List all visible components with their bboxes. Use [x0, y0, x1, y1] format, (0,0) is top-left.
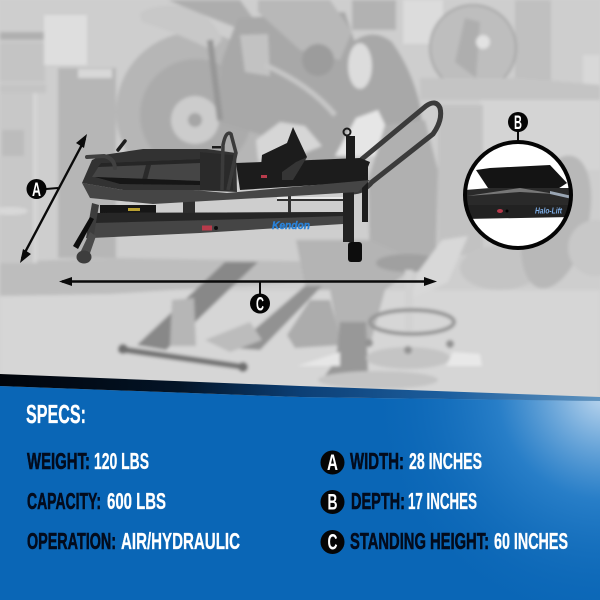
floor dark band: [0, 258, 330, 296]
compressor and big tyre: [462, 248, 528, 288]
spec: width: WIDTH:: [350, 448, 404, 474]
spec: depth: DEPTH:: [351, 488, 405, 514]
engine: [222, 11, 365, 160]
lower beam: [92, 212, 343, 238]
woman shoulder: [335, 110, 390, 156]
rear support posts: [343, 163, 368, 262]
dimension C arrow: [59, 277, 437, 316]
floor shadow: [318, 371, 438, 389]
inset circle: Halo-Lift: [535, 206, 562, 216]
dark curtain stripe: [515, 0, 550, 80]
side plate rail: [82, 180, 370, 204]
spec: depth: 17 INCHES: [408, 488, 477, 514]
tool chest: [58, 68, 116, 258]
spec: standing height: STANDING HEIGHT:: [350, 528, 489, 554]
badge C: C: [256, 294, 264, 316]
left bench: [0, 31, 44, 41]
heading: specs: SPECS:: [26, 399, 86, 429]
spec: depth: [320, 488, 477, 514]
dimension A arrow: [20, 134, 87, 263]
background: greyscale workshop photo: [0, 0, 600, 400]
spec: depth: B: [328, 490, 338, 514]
spec: weight: WEIGHT:: [27, 448, 90, 474]
badge B: B: [514, 113, 522, 134]
tray tie-down: [118, 141, 125, 150]
woman legs: [296, 240, 405, 340]
tire: [116, 34, 261, 192]
stool: [376, 254, 428, 273]
upper right post: [344, 128, 355, 160]
spec: width: A: [327, 450, 338, 475]
connecting rails: [100, 196, 343, 214]
blue specs panel: [0, 374, 600, 600]
spec: width: 28 INCHES: [409, 448, 482, 474]
clipboard: [44, 15, 87, 65]
spec: capacity: 600 LBS: [107, 488, 166, 514]
logo: Kendon: [272, 220, 310, 232]
dimension B inset: [465, 112, 572, 248]
lift scissor base: [137, 262, 258, 350]
wheel hoop: [222, 133, 236, 190]
product: motorcycle lift: [73, 103, 441, 264]
wall poster: [352, 0, 396, 30]
front tray rail: [87, 156, 115, 168]
main tray: [82, 149, 237, 192]
fan: [430, 5, 516, 91]
badge A: A: [32, 180, 41, 201]
lift handle: [352, 103, 441, 192]
woman hair and face: [354, 34, 422, 126]
fender and seat: [181, 32, 222, 47]
red tag: [202, 226, 212, 230]
spec: capacity: CAPACITY:: [27, 488, 101, 514]
woman torso: [368, 120, 438, 262]
spec: operation: AIR/HYDRAULIC: [121, 528, 240, 554]
right shelving: [420, 78, 600, 100]
spec: operation: OPERATION:: [27, 528, 116, 554]
panel top band: [0, 374, 600, 401]
spec: standing height: C: [328, 530, 338, 554]
tray knob: [212, 146, 221, 148]
boot front: [322, 322, 368, 380]
back window: [403, 0, 443, 44]
left caster leg: [73, 203, 99, 264]
floor: [116, 293, 457, 373]
wheel chock: [260, 127, 307, 180]
boot rear: [287, 300, 342, 348]
badge C: [250, 294, 270, 316]
spec: width: [320, 448, 482, 475]
bed: [236, 158, 370, 190]
spec: weight: 120 LBS: [94, 448, 149, 474]
spec: operation: [27, 528, 240, 554]
